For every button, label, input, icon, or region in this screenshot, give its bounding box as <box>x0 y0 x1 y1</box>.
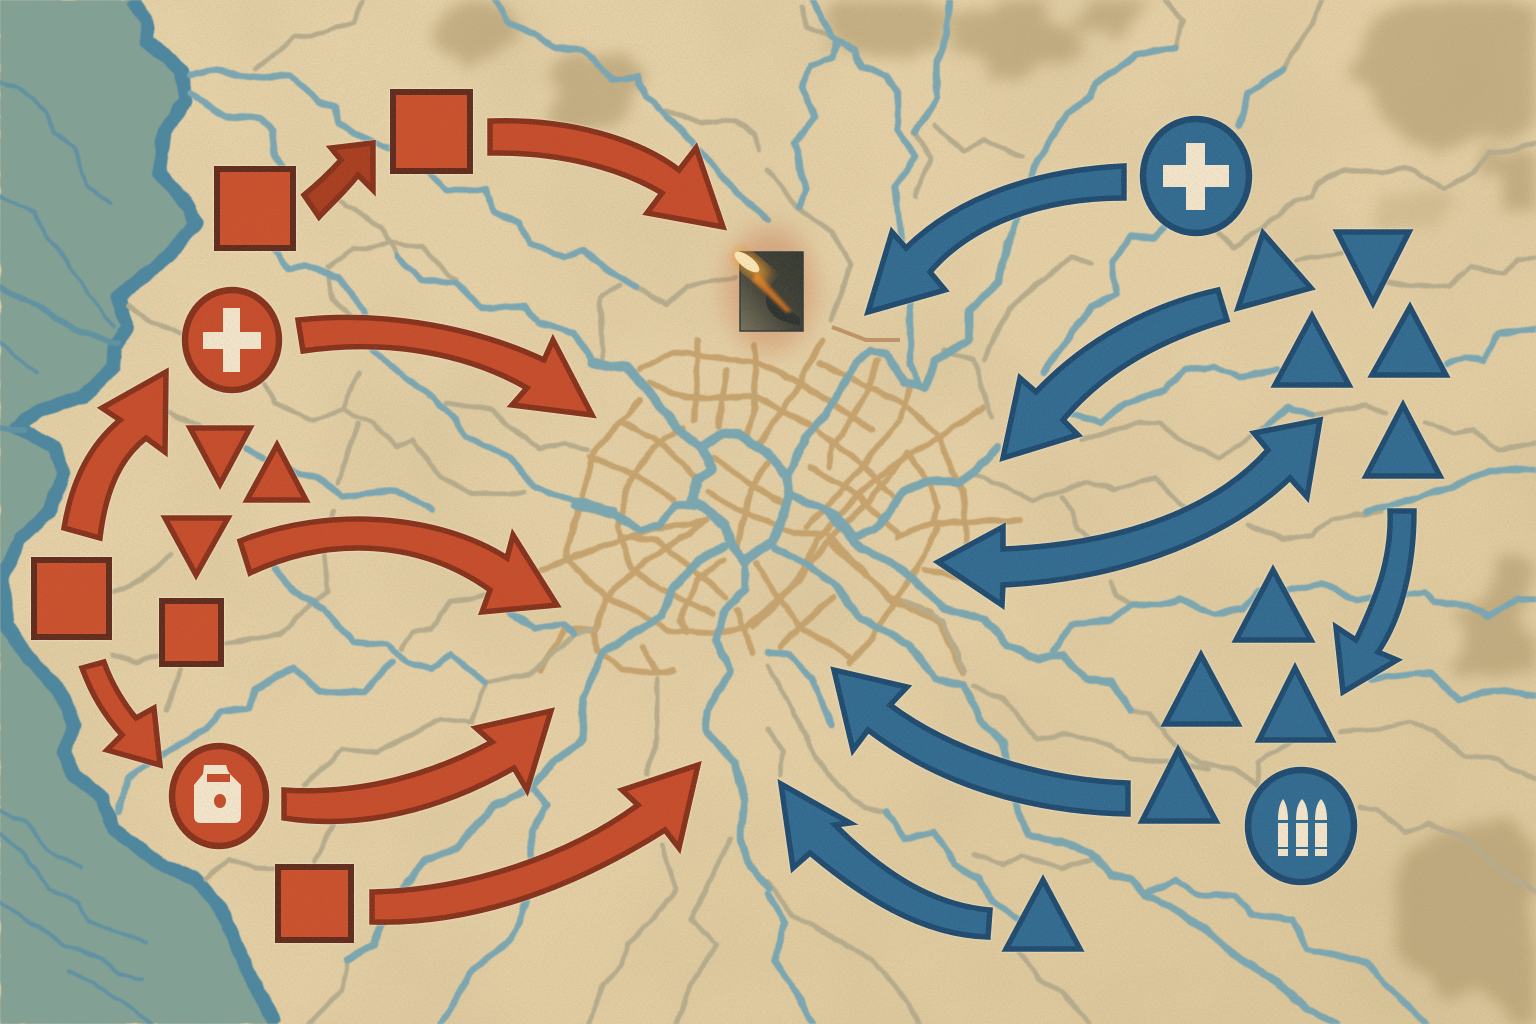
blue triangle unit 7 <box>1165 655 1238 724</box>
red arrow from supply unit <box>284 711 551 821</box>
red arrow to supply unit <box>82 662 160 765</box>
blue triangle unit 2 <box>1337 232 1409 303</box>
blue triangle unit 9 <box>1142 750 1216 821</box>
blue arrow toward southeast city <box>834 670 1128 814</box>
red supply unit <box>172 746 266 846</box>
blue triangle unit 8 <box>1259 668 1332 740</box>
flame streak <box>752 272 792 312</box>
blue triangle unit 3 <box>1275 316 1349 385</box>
red unit square 4 <box>162 601 221 664</box>
blue medical unit <box>1143 119 1249 233</box>
red arrow north along coast <box>64 372 166 538</box>
bullet 1 <box>1278 799 1288 856</box>
red triangle unit 2 <box>247 445 306 500</box>
red unit square 1 <box>217 169 293 248</box>
matchbox body <box>740 252 803 331</box>
rivers in the sea <box>0 82 152 1024</box>
blue force <box>781 119 1446 949</box>
red force <box>34 92 723 940</box>
blue triangle unit 1 <box>1238 233 1311 308</box>
red medical unit <box>185 290 279 390</box>
road to burning building <box>832 327 900 340</box>
red triangle unit 3 <box>165 518 228 575</box>
bullet 2 <box>1296 799 1308 856</box>
blue ammunition unit <box>1248 770 1354 882</box>
sea on the west coast <box>0 0 275 1024</box>
terrain stains <box>432 0 1536 1020</box>
blue arrow from bottom triangle <box>781 784 990 937</box>
blue arrow down the east side <box>1336 511 1414 692</box>
red arrow from medical unit <box>298 317 592 415</box>
blue triangle unit 4 <box>1372 307 1446 375</box>
red unit square 3 <box>34 560 109 637</box>
red arrow from triangles <box>240 519 557 612</box>
blue triangle unit 10 <box>1006 880 1080 949</box>
bullet 3 <box>1315 799 1327 856</box>
blue arrow from upper triangles <box>1003 290 1227 458</box>
red unit square 2 <box>393 92 470 171</box>
red arrow from bottom square <box>372 765 698 922</box>
burning matchbox objective <box>724 228 816 352</box>
blue double-headed arrow <box>938 420 1320 605</box>
scorch glow <box>724 228 816 352</box>
blue triangle unit 5 <box>1366 405 1440 476</box>
red arrow to objective <box>490 121 723 227</box>
box inner shadow <box>766 282 800 326</box>
major blue rivers of the city <box>348 243 1337 1024</box>
blue triangle unit 6 <box>1236 570 1311 640</box>
coastline <box>2 0 275 1024</box>
flame core <box>731 248 763 276</box>
blue arrow from medical unit <box>868 166 1124 312</box>
flame glow <box>729 244 775 288</box>
sea fill <box>0 0 275 1024</box>
red unit square 5 <box>278 867 351 940</box>
red triangle unit 1 <box>190 428 250 484</box>
street grid of the central city <box>540 340 1020 673</box>
red arrow small to square <box>304 143 373 217</box>
